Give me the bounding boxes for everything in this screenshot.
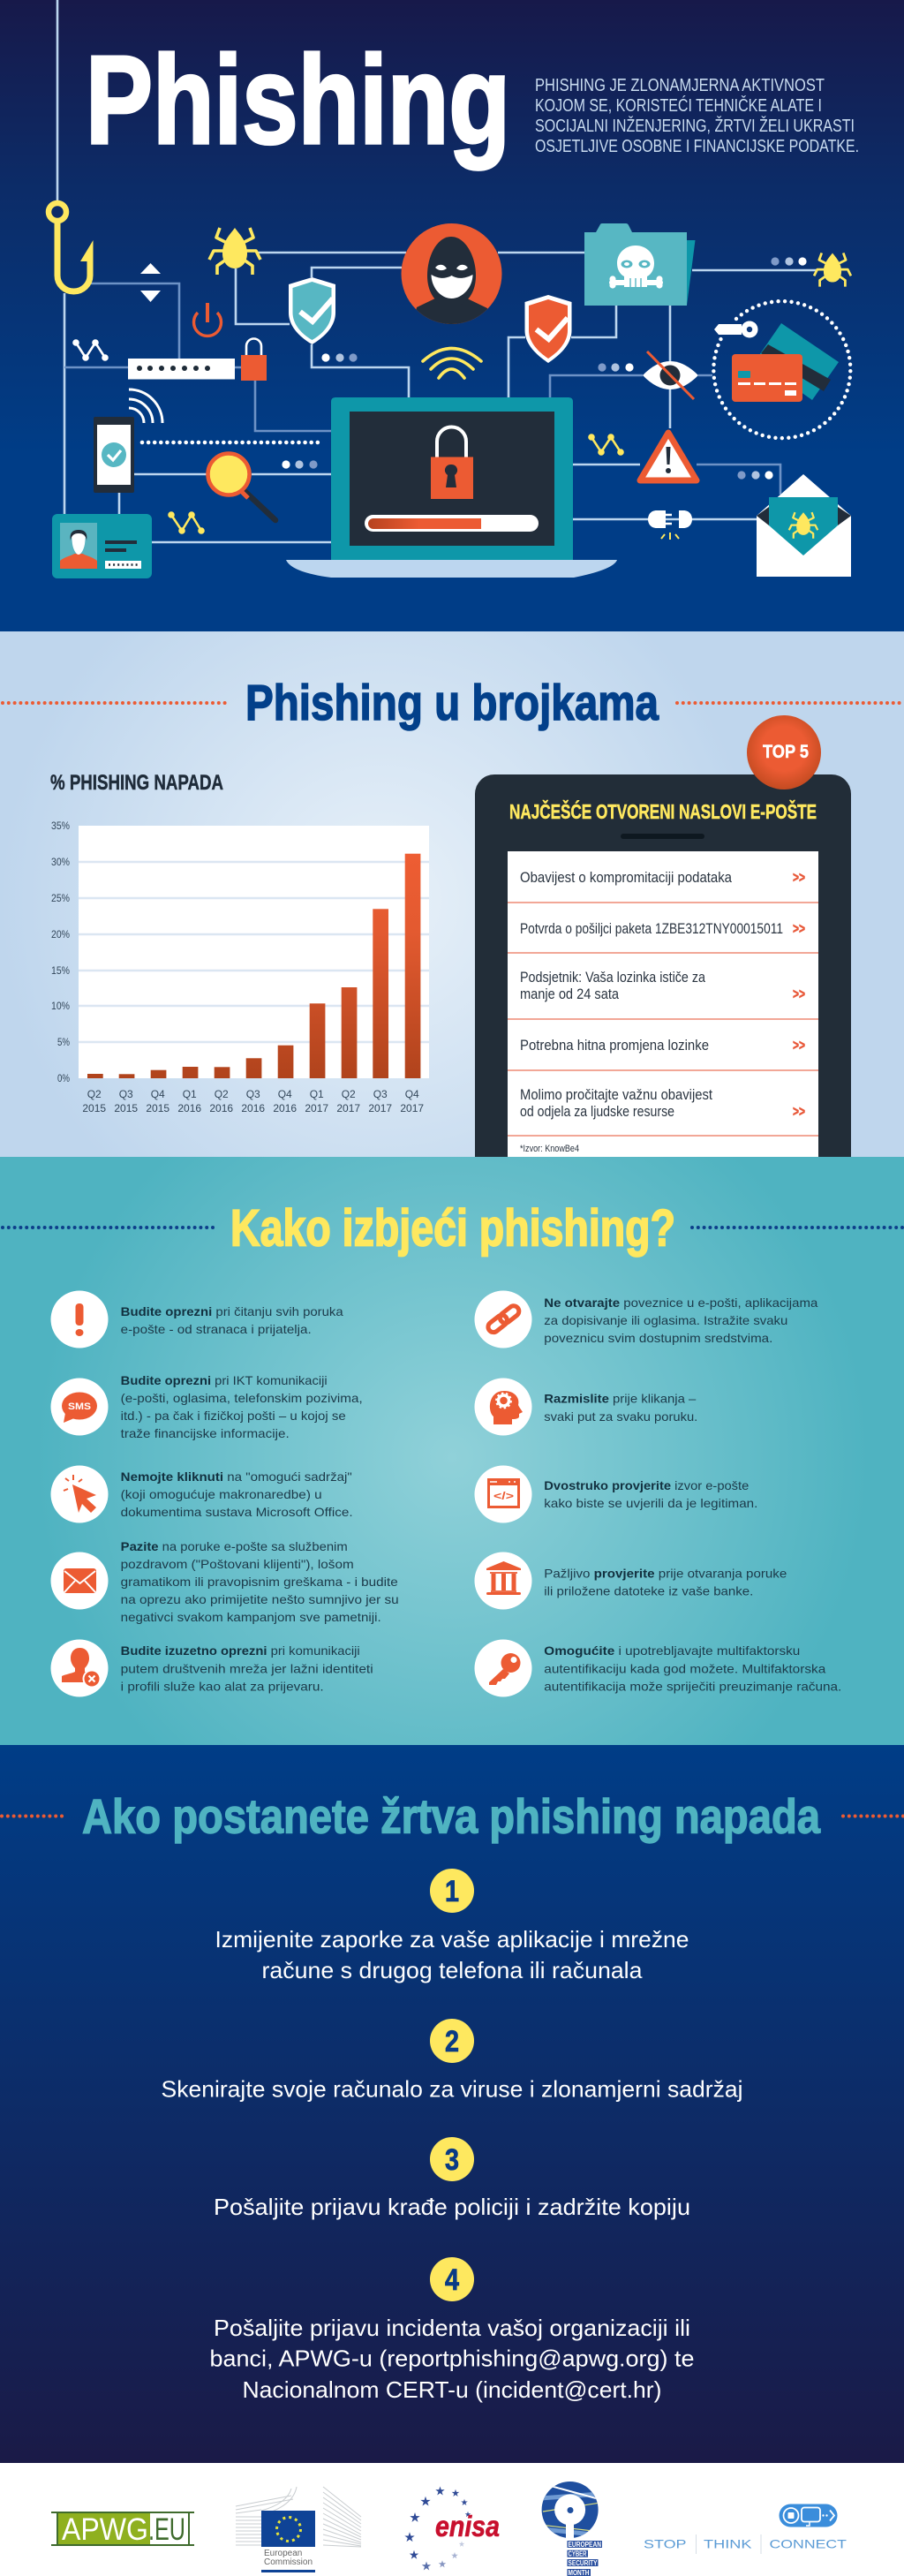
step 1: Izmijenite zaporke za vaše aplikacije i mrežne [215,1926,689,1953]
bar chart: 2016 [209,1102,233,1114]
bar chart: Q2 [342,1088,356,1100]
heading: Kako izbjeći phishing? [230,1199,675,1258]
tip: multi factor [475,1639,841,1697]
bar chart: 2015 [82,1102,106,1114]
logo: APWG.EU [51,2512,194,2547]
email subject list: Potvrda o pošiljci paketa 1ZBE312TNY00015011 [520,920,783,937]
tip: be careful reading: e-pošte - od stranaca i prijatelja. [121,1322,312,1336]
tip: double check [475,1466,757,1522]
tip: social networks: i profili služe kao alat za prijevaru. [121,1680,324,1694]
icon: warning triangle [640,433,697,480]
bar chart: 5% [57,1036,70,1048]
logo: European Commission: Commission [264,2557,313,2567]
bar chart: 2016 [177,1102,201,1114]
icon: laptop [286,397,617,578]
email subject list: >> [793,1103,805,1120]
icon: key and credit cards [713,301,850,438]
network lines [57,0,817,542]
icon: plug [648,510,692,540]
email subject list: manje od 24 sata [520,986,619,1002]
logo: Stop Think Connect: CONNECT [770,2536,848,2550]
email subject list: Podsjetnik: Vaša lozinka ističe za [520,969,705,986]
tip: watch emails: negativci svakom kampanjom sve pametniji. [121,1610,381,1624]
badge: top 5: TOP 5 [763,742,809,762]
bar chart: Q1 [310,1088,324,1100]
bar chart: 2016 [241,1102,265,1114]
three dots [282,460,318,469]
tip: links: Ne otvarajte poveznice u e-pošti, aplikacijama [544,1296,818,1310]
icon: crossed eye [643,351,698,399]
panel: hero [0,0,904,631]
logo: European Cyber Security Month: EUROPEAN [569,2541,601,2549]
step 3: Pošaljite prijavu krađe policiji i zadržite kopiju [214,2194,690,2220]
email subject list: >> [793,920,805,937]
bar chart: 20% [51,928,70,941]
logo: European Cyber Security Month [540,2482,602,2576]
bar chart: 15% [51,964,70,977]
icon: bug left [209,228,260,275]
icon: infected envelope [757,474,851,577]
step 1 [215,1869,689,1983]
bar chart: 30% [51,856,70,868]
email subject list [520,869,805,1154]
tip: watch emails: gramatikom ili pravopisnim greškama - i budite [121,1575,398,1589]
tip: ICT communication: Budite oprezni pri IKT komunikaciji [121,1373,328,1387]
email subject list: Molimo pročitajte važnu obavijest [520,1086,712,1103]
tip: be careful reading [51,1291,343,1348]
icon: phone [94,417,134,493]
tip: ICT communication: SMS [68,1401,91,1412]
bar chart: 2015 [114,1102,138,1114]
bar chart: 35% [51,820,70,832]
bar chart: Q4 [151,1088,165,1100]
tip: bank: ili priložene datoteke iz vaše banke. [544,1584,753,1598]
tip: be careful reading: Budite oprezni pri čitanju svih poruka [121,1304,343,1318]
tip: double check: kako biste se uvjerili da je legitiman. [544,1496,757,1510]
email subject list: Potrebna hitna promjena lozinke [520,1037,709,1054]
logo: Stop Think Connect: THINK [704,2536,752,2550]
tip: multi factor: autentifikacija može spriječiti preuzimanje računa. [544,1680,841,1694]
icon: zigzag white [74,341,108,360]
tip: do not click: (koji omogućuje makronaredbe) u [121,1487,322,1501]
icon: teal shield [289,277,335,344]
step 4: 4 [445,2263,459,2297]
tip: do not click: dokumentima sustava Microsoft Office. [121,1505,353,1519]
title: Phishing [86,30,510,170]
icon: zigzag yellow left [170,512,203,533]
big padlock [431,427,473,499]
panel: phishing in numbers [0,631,904,1157]
tip: watch emails: Pazite na poruke e-pošte sa službenim [121,1539,348,1553]
step 2: 2 [445,2025,459,2059]
tip: ICT communication: (e-pošti, oglasima, telefonskim pozivima, [121,1391,363,1405]
tip: bank: Pažljivo provjerite prije otvaranja poruke [544,1567,787,1581]
email subject list: >> [793,869,805,886]
bar chart: Q3 [373,1088,388,1100]
progress bar [365,515,539,532]
icon: id card [52,514,152,578]
three dots [737,471,773,480]
tip: links: za dopisivanje ili oglasima. Istražite svaku [544,1313,787,1327]
icon: up down arrows [140,263,161,302]
bar chart: Q3 [246,1088,260,1100]
tip: watch emails: na oprezu ako primijetite nešto sumnjivo jer su [121,1592,399,1606]
tip: double check: Dvostruko provjerite izvor e-pošte [544,1478,750,1492]
email subject list: Obavijest o kompromitaciji podataka [520,869,732,886]
tip: bank [475,1552,787,1609]
logo: enisa [404,2487,500,2570]
bar chart: 10% [51,1000,70,1012]
badge: top 5 [747,715,821,789]
tip: watch emails [51,1539,399,1624]
intro text: PHISHING JE ZLONAMJERNA AKTIVNOST [535,76,825,95]
step 2: Skenirajte svoje računalo za viruse i zlonamjerni sadržaj [161,2075,743,2102]
icon: orange shield [524,295,572,363]
step 1: račune s drugog telefona ili računala [261,1957,643,1983]
panel: how to avoid phishing [0,1157,904,1745]
bar chart: 2015 [146,1102,170,1114]
bar chart: 2017 [305,1102,328,1114]
icon: signal arcs [129,389,162,423]
tip: social networks: Budite izuzetno oprezni pri komunikaciji [121,1643,360,1658]
intro text: KOJOM SE, KORISTEĆI TEHNIČKE ALATE I [535,95,822,116]
logo: European Commission [236,2487,361,2572]
panel: if you become a victim [0,1745,904,2463]
bar chart: Q3 [119,1088,133,1100]
step 3: 3 [445,2143,459,2177]
logo: enisa: enisa [435,2510,500,2542]
bar chart: Q1 [183,1088,197,1100]
tip: links: poveznicu svim dostupnim sredstvima. [544,1331,772,1345]
tip: do not click [51,1466,353,1522]
bar chart [51,820,429,1114]
step 4: banci, APWG-u (reportphishing@apwg.org) te [210,2346,694,2372]
logo: APWG.EU: APWG [62,2512,148,2547]
tip: think [475,1378,697,1436]
logo: European Commission: European [264,2549,302,2558]
tip: ICT communication [51,1373,363,1440]
icon: power [193,303,221,336]
icon: hacker [401,223,501,324]
step 3 [214,2137,690,2220]
icon: small padlock [241,339,267,381]
tip: ICT communication: traže financijske informacije. [121,1426,290,1440]
bar chart: 2017 [336,1102,360,1114]
icon: fish hook [49,203,94,291]
logo: European Cyber Security Month: SECURITY [569,2559,598,2567]
step 2 [161,2019,743,2102]
tip: ICT communication: itd.) - pa čak i fizičkoj pošti – u kojoj se [121,1409,346,1423]
heading: Phishing u brojkama [245,675,659,731]
icon: skull folder [584,223,696,306]
email subject list: >> [793,986,805,1002]
bar chart: Q2 [87,1088,102,1100]
tip: do not click: Nemojte kliknuti na "omogući sadržaj" [121,1469,352,1484]
email subject list: *Izvor: KnowBe4 [520,1144,579,1154]
bar chart: 2017 [400,1102,424,1114]
email subject list: >> [793,1037,805,1054]
bar chart: 2017 [368,1102,392,1114]
icon: magnifier [208,454,275,520]
bar chart: 25% [51,892,70,904]
step 1: 1 [445,1875,459,1908]
tip: think: Razmislite prije klikanja – [544,1392,697,1406]
icon: zigzag yellow right [590,434,623,454]
tip: multi factor: Omogućite i upotrebljavajte multifaktorsku [544,1643,800,1658]
panel: footer logos [51,2482,847,2576]
three dots [321,353,358,362]
tip: social networks: putem društvenih mreža jer lažni identiteti [121,1662,373,1676]
three dots [598,363,634,372]
intro text [535,76,859,156]
step 4 [210,2257,694,2403]
bar chart: 0% [57,1072,70,1084]
email subject list: od odjela za ljudske resurse [520,1103,674,1120]
tip: links [475,1291,818,1348]
bar chart: Q4 [278,1088,292,1100]
phone panel: top 5 subjects [475,715,851,1157]
icon: bug right [814,253,851,287]
logo: European Cyber Security Month: CYBER [569,2550,587,2558]
bar chart: Q4 [405,1088,419,1100]
chart title: % PHISHING NAPADA [50,771,223,795]
tip: double check: </> [493,1492,514,1502]
bar chart: 2016 [273,1102,297,1114]
tip: multi factor: autentifikaciju kada god možete. Multifaktorska [544,1662,826,1676]
step 4: Pošaljite prijavu incidenta vašoj organizaciji ili [214,2315,690,2341]
step 4: Nacionalnom CERT-u (incident@cert.hr) [242,2376,662,2403]
tip: watch emails: pozdravom ("Poštovani klijenti"), lošom [121,1557,354,1571]
icon: wifi [423,348,481,378]
bar chart: Q2 [215,1088,229,1100]
logo: Stop Think Connect [644,2504,848,2554]
logo: Stop Think Connect: STOP [644,2536,687,2550]
three dots [771,257,807,266]
icon: router [128,359,235,380]
tip: think: svaki put za svaku poruku. [544,1409,697,1424]
logo: APWG.EU: .EU [148,2512,185,2547]
tip: social networks [51,1639,373,1697]
